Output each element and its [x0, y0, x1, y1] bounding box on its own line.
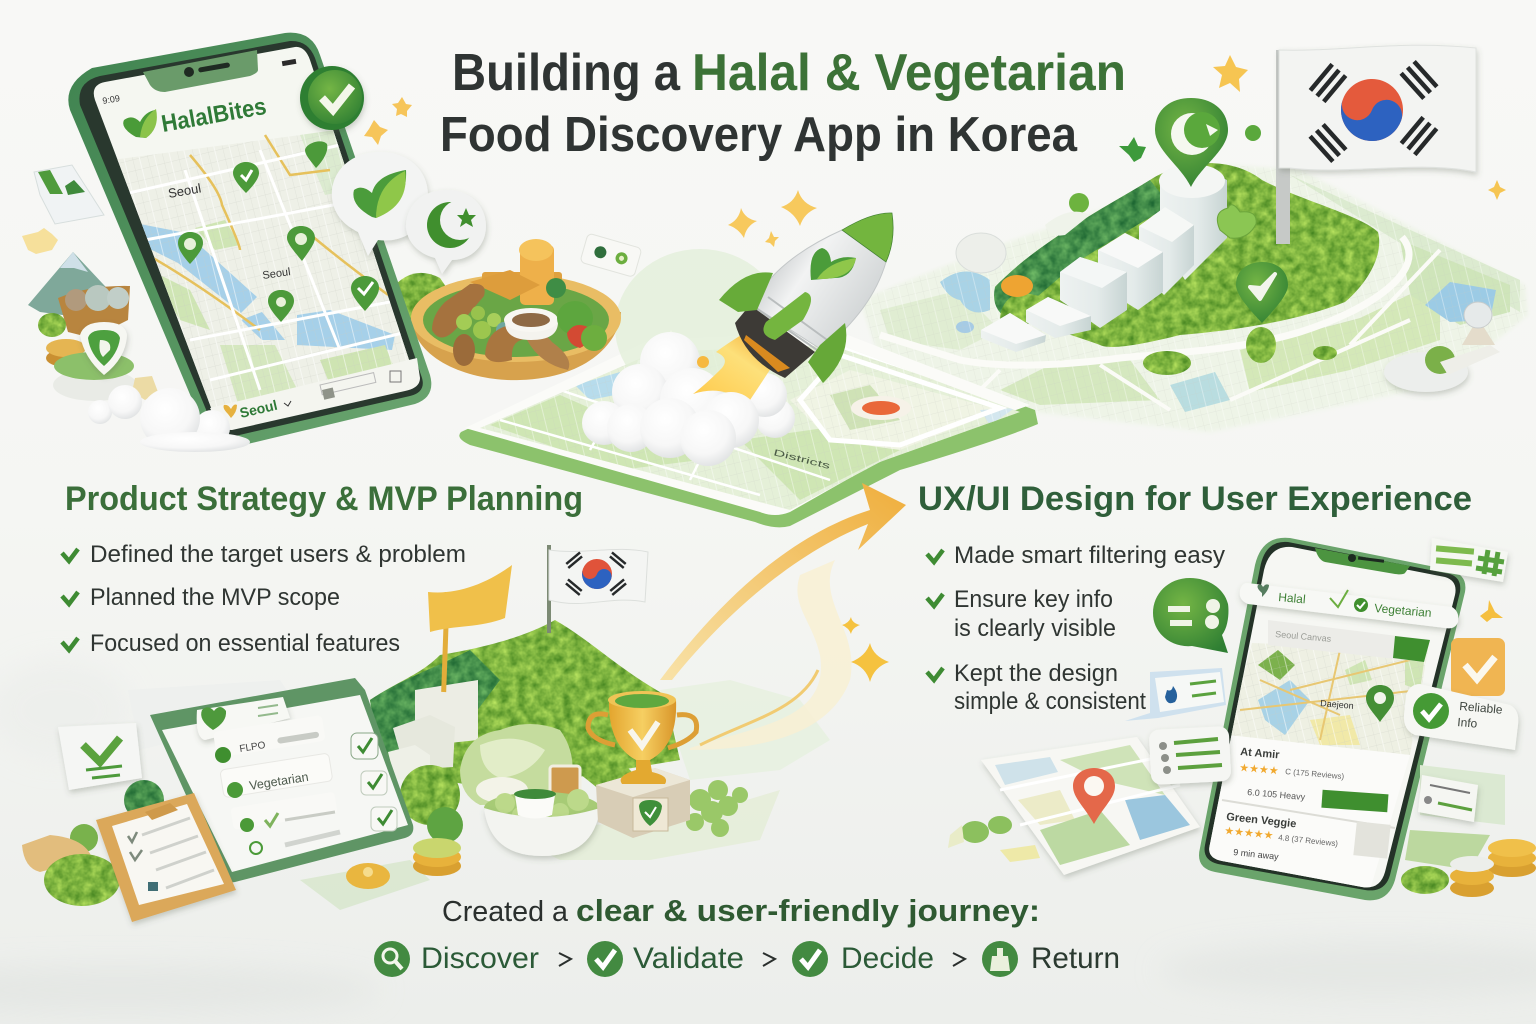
- bullet list: strategy: Planned the MVP scope: [90, 584, 340, 611]
- map pin: [1073, 768, 1115, 824]
- clouds at phone base: [88, 385, 250, 452]
- bullet list: UX: Made smart filtering easy: [954, 542, 1226, 569]
- icon: list card: [1149, 726, 1231, 785]
- icon: leaf heart speech bubble: [332, 152, 428, 256]
- heading: UX/UI design: UX/UI Design for User Experience: [918, 480, 1472, 518]
- arrow chevron 3: [953, 953, 965, 966]
- phone map labels: Seoul: [167, 180, 202, 201]
- icon: basket with stones: [58, 286, 130, 338]
- illustration: green hill: [994, 163, 1379, 347]
- green peas: [686, 780, 748, 837]
- icon: Korean flag large: [1276, 45, 1476, 244]
- illustration: rocket launch: [582, 213, 893, 466]
- icon: card with leaves: [34, 165, 104, 224]
- form row 1: [213, 715, 326, 763]
- heading: product strategy: Product Strategy & MVP Planning: [65, 480, 583, 518]
- icon: crescent speech bubble: [406, 190, 486, 274]
- phone map pins: [178, 141, 379, 322]
- icon: back card and folder: [1405, 765, 1505, 870]
- icon: filter chip top right: [1430, 538, 1508, 582]
- left cluster behind phone: [22, 165, 158, 401]
- veggie bits by map: [948, 816, 1040, 862]
- illustration: HalalBites phone: Seoul: [238, 397, 279, 421]
- rocket flame: [693, 332, 790, 400]
- bullet list: UX: Ensure key info: [954, 586, 1113, 613]
- form row 2: [220, 753, 333, 798]
- icon: coins: [46, 349, 86, 367]
- bullet list: strategy: Defined the target users & problem: [90, 541, 466, 568]
- icon: clipboard: [96, 793, 236, 922]
- illustration: salad bowl: [484, 789, 600, 856]
- form row 1: FLPO: [239, 740, 266, 755]
- phone notch: [143, 50, 258, 92]
- footer statement: clear & user-friendly journey:: [576, 893, 1040, 928]
- stars upper right: [1213, 55, 1506, 200]
- journey step: Discover: Discover: [421, 942, 539, 975]
- icon: check card: [58, 723, 142, 790]
- listing text: [1224, 746, 1345, 862]
- callout: Reliable Info: Info: [1457, 715, 1478, 731]
- listing text: C (175 Reviews): [1285, 767, 1345, 781]
- icon: crescent location pin: [1155, 98, 1228, 187]
- illustration: right phone: Seoul Canvas: [1275, 629, 1332, 644]
- app logo HalalBites: HalalBites: [159, 93, 268, 138]
- illustration: upper right city map: [860, 165, 1528, 432]
- callout: Reliable Info: [1404, 684, 1518, 750]
- main title: Food Discovery App in Korea: [440, 108, 1078, 162]
- bullet list: UX: simple & consistent: [954, 688, 1146, 715]
- cabbage: [460, 724, 572, 805]
- illustration: right phone: [1199, 538, 1465, 900]
- rocket smoke cloud: [582, 332, 795, 452]
- illustration: open map book: [459, 332, 1038, 527]
- rocket nozzle: [735, 305, 815, 378]
- icon: green chat bubble: [1153, 578, 1228, 653]
- rocket fins: [719, 272, 773, 312]
- icon: Korean flag small: [547, 545, 648, 633]
- bullet list: strategy: Focused on essential features: [90, 630, 400, 657]
- form tab with heart: [197, 697, 290, 740]
- illustration: mountain with produce: [300, 620, 830, 910]
- rocket heart leaf: [810, 248, 856, 280]
- bullet list: UX: is clearly visible: [954, 615, 1116, 642]
- filter chip: Halal and Vegetarian: Vegetarian: [1374, 601, 1432, 620]
- rocket smoke front: [640, 392, 759, 466]
- footer statement: Created a: [442, 896, 569, 928]
- icon: small floating tag card: [580, 233, 642, 277]
- illustration: rising white bar chart: [981, 164, 1227, 352]
- filter chip: Halal and Vegetarian: Halal: [1278, 590, 1306, 606]
- icon: leafy plant and dots: [956, 125, 1261, 273]
- main title: [440, 44, 1126, 162]
- bullet list: UX: Kept the design: [954, 660, 1118, 687]
- stars by phone: [364, 97, 412, 145]
- illustration: HalalBites phone: Seoul: [262, 266, 291, 282]
- illustration: HalalBites phone: 9:09: [102, 93, 121, 106]
- journey step: Decide: Decide: [841, 942, 934, 975]
- listing text: At Amir: [1240, 746, 1281, 761]
- rocket body: [752, 230, 886, 350]
- listing text: ★★★★★: [1224, 825, 1274, 842]
- phone bottom bar: [210, 358, 420, 430]
- coins centre: [346, 838, 461, 889]
- form row 2: Vegetarian: [248, 770, 310, 793]
- phone map: [1228, 643, 1428, 755]
- journey step: Validate: Validate: [633, 942, 744, 975]
- journey step: Return: [982, 941, 1120, 977]
- callout: Reliable Info: Reliable: [1459, 699, 1503, 717]
- phone map: [112, 130, 418, 410]
- road: [880, 237, 1409, 365]
- notch: [1315, 548, 1410, 574]
- form row 3: [230, 792, 340, 854]
- bushes: [400, 765, 460, 825]
- sparkle stars above rocket: [728, 190, 817, 247]
- icon: gold coins: [1401, 839, 1536, 897]
- listing text: 6.0 105 Heavy: [1247, 787, 1306, 802]
- filter chip: Halal and Vegetarian: [1240, 583, 1458, 628]
- illustration: paper map with pin: [981, 737, 1200, 875]
- restaurant card: [1209, 736, 1394, 888]
- journey step: Validate: [587, 941, 744, 977]
- icon: yellow star: [22, 228, 58, 254]
- illustration: open map book: Districts: [773, 447, 832, 471]
- icon: check location pin on hill: [1236, 262, 1288, 323]
- icon: yellow flag: [428, 565, 512, 692]
- listing text: 4.8 (37 Reviews): [1278, 833, 1339, 848]
- journey step: Decide: [792, 941, 934, 977]
- icon: shield badge on platform: [53, 369, 137, 401]
- arrow: yellow journey arrow: [660, 483, 906, 750]
- bushes and log left: [22, 780, 164, 906]
- icon: blue info card: [1125, 668, 1226, 721]
- map pin on phone: [1366, 685, 1394, 722]
- journey step: Discover: [374, 941, 539, 977]
- icon: mountain: [28, 252, 118, 320]
- bullet list: UX: [927, 542, 1226, 715]
- illustration: HalalBites phone: [68, 33, 431, 447]
- icon: dish on pedestal: [1384, 302, 1500, 392]
- app logo HalalBites: [123, 93, 268, 138]
- journey step: Return: Return: [1031, 942, 1120, 975]
- main title: Halal & Vegetarian: [692, 44, 1126, 102]
- form checkboxes: [351, 733, 397, 831]
- illustration: food bowl: [395, 239, 621, 380]
- white steps: [415, 680, 478, 745]
- arrow chevron 2: [763, 953, 775, 966]
- listing text: Green Veggie: [1226, 811, 1297, 830]
- star near right phone: [1480, 600, 1503, 622]
- illustration: form checklist card: [128, 678, 413, 882]
- sparkle stars by arrow: [842, 617, 889, 682]
- listing text: ★★★★: [1239, 762, 1279, 777]
- icon: green check badge: [300, 66, 364, 130]
- icon: orange check card: [1451, 638, 1505, 696]
- bullet list: strategy: [62, 541, 466, 657]
- golden stacked pieces: [470, 239, 562, 305]
- listing text: 9 min away: [1233, 847, 1280, 862]
- illustration: gold trophy on box: [588, 691, 697, 838]
- search bar: [1268, 620, 1430, 662]
- illustration: right phone: Daejeon: [1320, 698, 1354, 711]
- arrow chevron 1: [559, 953, 571, 966]
- main title: Building a: [452, 44, 681, 102]
